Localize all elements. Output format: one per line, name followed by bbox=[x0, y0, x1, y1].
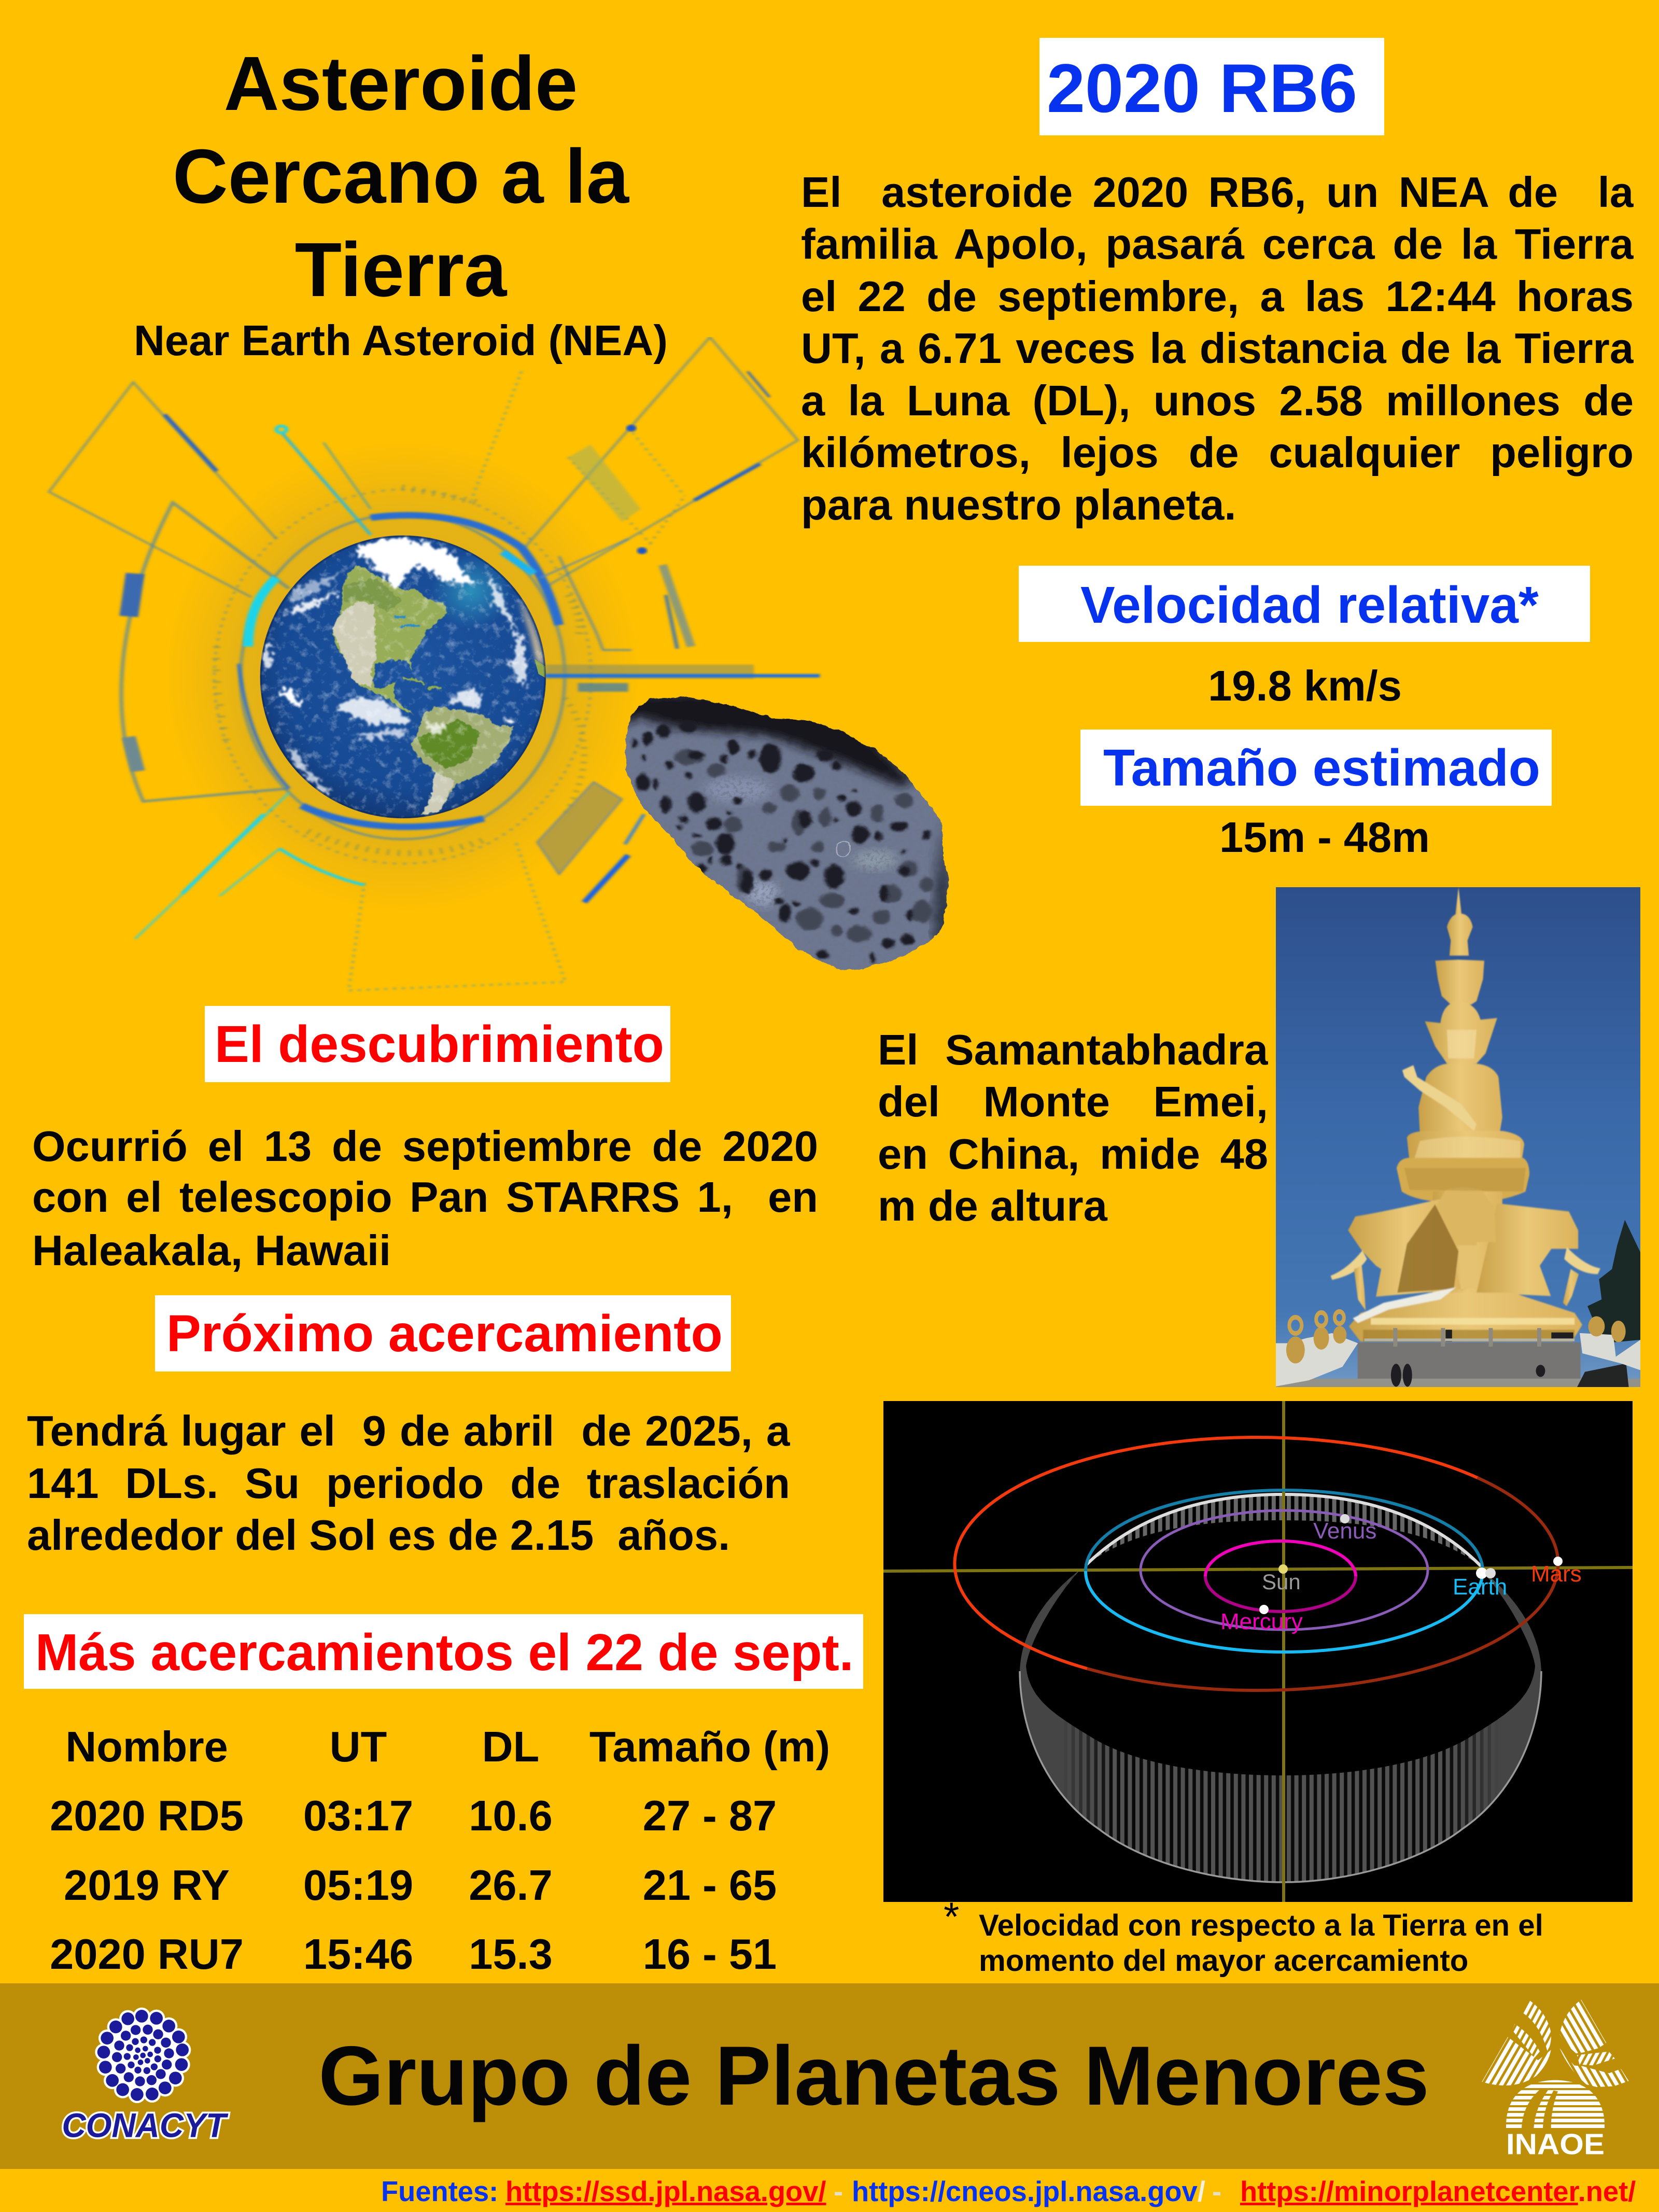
text block: description bbox=[801, 168, 1634, 529]
dark craters bbox=[631, 721, 930, 964]
Africa limb bbox=[518, 599, 545, 666]
text block: discovery: Ocurrió el 13 de septiembre de 2020 bbox=[32, 1122, 818, 1170]
footer title: Grupo de Planetas Menores bbox=[318, 2029, 1429, 2123]
top head bbox=[1447, 914, 1473, 956]
heading: Próximo acercamiento: Próximo acercamiento bbox=[166, 1305, 723, 1363]
white elephants bbox=[1276, 1333, 1640, 1387]
row: 2020 RD5: 2020 RD5 bbox=[50, 1791, 244, 1840]
logo: CONACYT bbox=[52, 2001, 238, 2147]
footnote bbox=[944, 1893, 1566, 1976]
planet markers bbox=[1259, 1514, 1563, 1614]
elephants centre filler bbox=[1432, 1192, 1502, 1296]
table header: UT bbox=[330, 1723, 387, 1771]
text block: next approach: 141 DLs. Su periodo de traslación bbox=[27, 1459, 790, 1507]
text block: next approach: alrededor del Sol es de 2.15 años. bbox=[27, 1511, 730, 1559]
row: 2020 RD5: 10.6 bbox=[469, 1791, 553, 1840]
illustration: asteroid bbox=[625, 696, 949, 970]
text block: next approach bbox=[27, 1400, 790, 1566]
tree bbox=[1587, 1220, 1640, 1343]
table: close approaches bbox=[26, 1716, 855, 1981]
third tier head bbox=[1425, 1001, 1497, 1063]
planet labels: Mercury bbox=[1220, 1609, 1303, 1634]
axes bbox=[883, 1401, 1633, 1902]
chart: orbit diagram bbox=[883, 1401, 1633, 1902]
thin cloud texture bbox=[260, 536, 545, 818]
row: 2020 RU7: 15:46 bbox=[303, 1930, 413, 1978]
planet labels bbox=[1220, 1518, 1582, 1634]
text block: description: kilómetros, lejos de cualquier peligro bbox=[801, 428, 1634, 477]
sources line: https://ssd.jpl.nasa.gov/ bbox=[505, 2176, 826, 2207]
logo: CONACYT: CONACYT bbox=[62, 2106, 229, 2145]
INAOE wordmark: INAOE bbox=[1506, 2127, 1605, 2161]
title bbox=[173, 41, 629, 313]
text block: description: El asteroide 2020 RB6, un NEA de la bbox=[801, 168, 1634, 216]
table header bbox=[26, 1716, 855, 1779]
row: 2020 RD5: 27 - 87 bbox=[643, 1791, 777, 1840]
sceptre arm bbox=[1402, 1065, 1477, 1131]
text block: discovery: con el telescopio Pan STARRS 1, en bbox=[32, 1173, 818, 1221]
sources line: https://minorplanetcenter.net/ bbox=[1240, 2176, 1636, 2207]
row: 2019 RY bbox=[26, 1854, 855, 1916]
title: Asteroide bbox=[224, 41, 578, 127]
North America bbox=[332, 565, 447, 716]
dark top shadow bbox=[621, 693, 915, 786]
right elephant bbox=[1477, 1203, 1578, 1296]
asteroid orbit drop lines bbox=[1020, 1494, 1541, 1882]
value: velocity: 19.8 km/s bbox=[1208, 662, 1402, 710]
text block: discovery bbox=[32, 1115, 818, 1281]
photo: Samantabhadra statue bbox=[1276, 887, 1640, 1387]
text block: statue caption: El Samantabhadra bbox=[878, 1026, 1268, 1074]
sources line: - bbox=[1212, 2176, 1221, 2207]
row: 2020 RU7: 16 - 51 bbox=[643, 1930, 777, 1978]
heading: Tamaño estimado: Tamaño estimado bbox=[1103, 739, 1540, 797]
value: size: 15m - 48m bbox=[1219, 813, 1430, 861]
logo: INAOE bbox=[1462, 1991, 1638, 2167]
footnote: * bbox=[944, 1894, 959, 1939]
visitors bbox=[1391, 1329, 1573, 1387]
sources line: - bbox=[834, 2176, 843, 2207]
spire bbox=[1455, 887, 1462, 917]
footnote: Velocidad con respecto a la Tierra en el bbox=[979, 1909, 1543, 1942]
text block: statue caption: del Monte Emei, bbox=[878, 1077, 1268, 1126]
table header: DL bbox=[482, 1723, 539, 1771]
text block: description: familia Apolo, pasará cerca de la Tierra bbox=[801, 220, 1634, 268]
sources line: Fuentes: bbox=[381, 2176, 498, 2207]
row: 2019 RY: 21 - 65 bbox=[643, 1861, 777, 1909]
footer band bbox=[0, 1983, 1659, 2169]
heading: Más acercamientos: Más acercamientos el 22 de sept. bbox=[35, 1623, 854, 1682]
orbit: Venus bbox=[1141, 1510, 1428, 1630]
text block: description: para nuestro planeta. bbox=[801, 481, 1236, 529]
second tier heads bbox=[1435, 960, 1484, 1004]
sources line: https://cneos.jpl.nasa.gov/ bbox=[852, 2176, 1205, 2207]
heading: 2020 RB6: 2020 RB6 bbox=[1047, 50, 1357, 127]
orbit: Mercury bbox=[1205, 1541, 1356, 1612]
row: 2020 RU7: 15.3 bbox=[469, 1930, 553, 1978]
statue shading bbox=[1397, 1205, 1458, 1293]
planet labels: Earth bbox=[1453, 1574, 1507, 1600]
table header: Nombre bbox=[65, 1723, 228, 1771]
text block: description: UT, a 6.71 veces la distancia de la Tierra bbox=[801, 324, 1634, 372]
left elephant bbox=[1348, 1199, 1461, 1297]
row: 2020 RU7 bbox=[26, 1923, 855, 1985]
row: 2020 RD5: 03:17 bbox=[303, 1791, 413, 1840]
footnote: momento del mayor acercamiento bbox=[979, 1944, 1468, 1978]
text block: statue caption: en China, mide 48 bbox=[878, 1130, 1268, 1178]
text block: next approach: Tendrá lugar el 9 de abril de 2025, a bbox=[27, 1407, 790, 1455]
heading: El descubrimiento: El descubrimiento bbox=[215, 1015, 664, 1073]
title: Tierra bbox=[295, 227, 507, 313]
text block: description: el 22 de septiembre, a las 12:44 horas bbox=[801, 272, 1634, 320]
torso bbox=[1418, 1063, 1502, 1132]
legs bbox=[1407, 1131, 1524, 1161]
sources line bbox=[381, 2173, 1646, 2209]
row: 2020 RD5 bbox=[26, 1785, 855, 1847]
base disc bbox=[1349, 1293, 1582, 1341]
heading: Velocidad relativa: Velocidad relativa* bbox=[1080, 576, 1539, 634]
illustration: HUD rings behind the Earth bbox=[46, 337, 822, 992]
text block: discovery: Haleakala, Hawaii bbox=[32, 1226, 391, 1275]
dome bbox=[1506, 2080, 1605, 2129]
planet labels: Sun bbox=[1262, 1570, 1301, 1594]
table header: Tamaño (m) bbox=[589, 1723, 830, 1771]
Caribbean islands bbox=[403, 679, 441, 688]
centre elephant bbox=[1435, 1187, 1496, 1291]
row: 2019 RY: 26.7 bbox=[469, 1861, 553, 1909]
illustration: Earth bbox=[260, 535, 546, 818]
railing bbox=[1365, 1338, 1574, 1342]
right wing bbox=[1559, 2000, 1606, 2053]
heading: Velocidad relativa bbox=[1019, 566, 1590, 642]
saddle ornaments bbox=[1286, 1316, 1626, 1363]
clouds bbox=[261, 538, 527, 796]
text block: statue caption bbox=[878, 1016, 1268, 1234]
text block: description: a la Luna (DL), unos 2.58 millones de bbox=[801, 376, 1634, 425]
orbit: Earth bbox=[1086, 1490, 1483, 1652]
left wing bbox=[1482, 2037, 1551, 2085]
South America bbox=[412, 706, 513, 816]
steps bbox=[1358, 1342, 1581, 1387]
subtitle: Near Earth Asteroid (NEA) bbox=[134, 316, 668, 365]
orbit: Mars bbox=[954, 1437, 1558, 1690]
row: 2019 RY: 2019 RY bbox=[64, 1861, 230, 1909]
planet labels: Venus bbox=[1313, 1518, 1376, 1544]
soft craters bbox=[674, 750, 933, 943]
planet labels: Mars bbox=[1531, 1561, 1582, 1587]
row: 2020 RU7: 2020 RU7 bbox=[50, 1930, 244, 1978]
lotus bbox=[1397, 1158, 1529, 1202]
row: 2019 RY: 05:19 bbox=[303, 1861, 413, 1909]
title: Cercano a la bbox=[173, 134, 629, 219]
text block: statue caption: m de altura bbox=[878, 1182, 1107, 1230]
